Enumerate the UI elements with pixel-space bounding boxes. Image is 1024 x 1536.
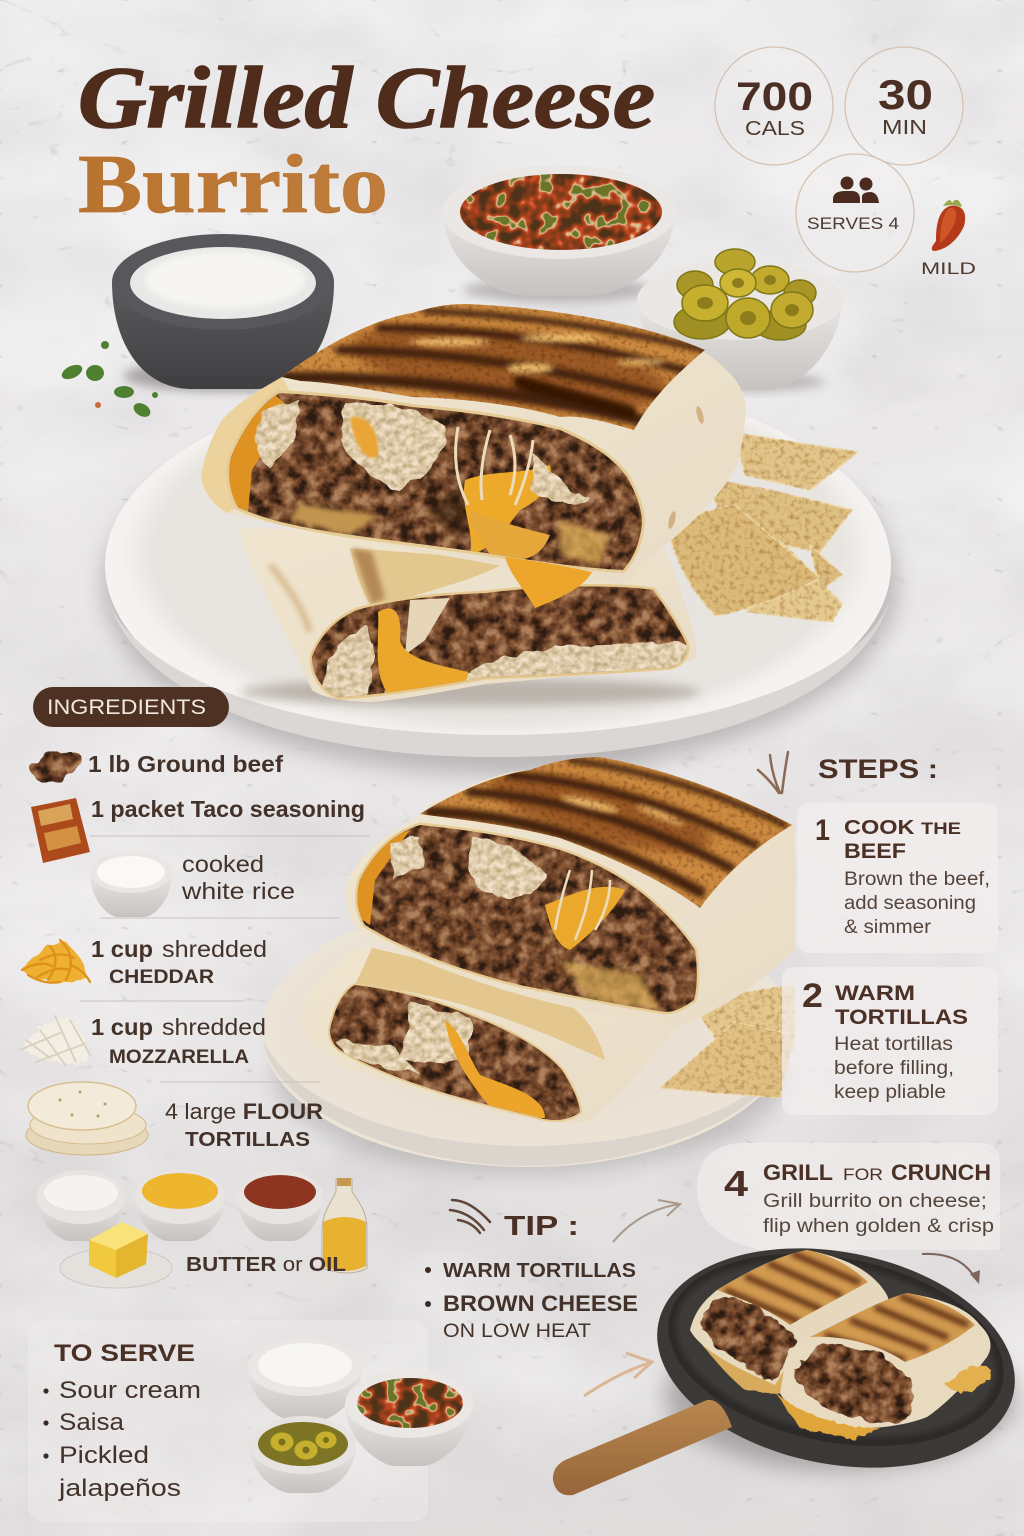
ingredient: ground beef xyxy=(30,751,283,783)
step 2 card: WARM xyxy=(835,982,915,1005)
title xyxy=(78,50,655,231)
steps heading xyxy=(758,752,938,793)
ingredient: taco seasoning: 1 packet Taco seasoning xyxy=(91,796,365,822)
ingredient: mozzarella: MOZZARELLA xyxy=(109,1047,249,1068)
step 1 card xyxy=(797,803,998,953)
upper burrito on main plate xyxy=(201,300,746,608)
serving bowl: sour cream xyxy=(248,1338,362,1420)
ingredient: cheddar: shredded xyxy=(162,936,267,962)
step 1 card: BEEF xyxy=(844,840,906,863)
ingredient: butter or oil: BUTTER or OIL xyxy=(186,1254,346,1276)
tip block: BROWN CHEESE xyxy=(443,1291,638,1316)
to serve panel: TO SERVE xyxy=(54,1340,195,1367)
tortilla chips xyxy=(668,433,858,622)
ingredient: cheddar: CHEDDAR xyxy=(109,967,214,988)
step 1 card: COOK THE xyxy=(844,817,961,839)
step 1 card: & simmer xyxy=(844,917,932,938)
step 2 card: before filling, xyxy=(834,1058,954,1079)
burrito in pan: front xyxy=(775,1293,992,1440)
ingredient: flour tortillas: 4 large FLOUR xyxy=(165,1099,323,1124)
step 4 card: CRUNCH xyxy=(891,1160,991,1185)
ingredient: white rice xyxy=(90,851,295,917)
wooden handle xyxy=(553,1400,732,1495)
badge: 30 min: 30 xyxy=(878,71,933,118)
to serve panel xyxy=(28,1320,428,1522)
step 4 card: 4 xyxy=(724,1163,748,1204)
step 4 card: flip when golden & crisp xyxy=(763,1216,994,1237)
step 2 card: 2 xyxy=(802,977,823,1015)
burrito in pan: rear xyxy=(690,1250,889,1385)
lower burrito on main plate xyxy=(240,527,700,706)
ingredients pill: INGREDIENTS xyxy=(47,696,206,719)
step 2 card xyxy=(782,967,998,1115)
badge: 700 cals xyxy=(715,47,833,165)
ingredient: white rice: white rice xyxy=(181,878,295,904)
to serve panel: Sour cream xyxy=(59,1377,201,1404)
to serve panel: jalapeños xyxy=(58,1475,181,1502)
step 1 card: Brown the beef, xyxy=(844,869,990,890)
ingredient: butter or oil xyxy=(37,1170,367,1288)
step 4 card: Grill burrito on cheese; xyxy=(763,1191,987,1212)
ingredient: mozzarella: 1 cup xyxy=(91,1014,153,1040)
title: Grilled Cheese xyxy=(78,50,655,147)
ingredient: mozzarella xyxy=(20,1014,266,1068)
ingredient: flour tortillas xyxy=(26,1082,323,1155)
bowl: pickled jalapeños xyxy=(637,249,843,392)
step 4 card xyxy=(697,1143,1000,1250)
icon: chili, mild xyxy=(921,200,976,278)
icon: chili, mild: MILD xyxy=(921,259,976,278)
to serve panel: Pickled xyxy=(59,1442,149,1469)
skillet with burritos xyxy=(552,1248,1024,1496)
ingredient: mozzarella: shredded xyxy=(162,1014,266,1040)
herbs garnish xyxy=(59,341,158,420)
serving bowl: jalapeños xyxy=(250,1416,356,1493)
tip block: ON LOW HEAT xyxy=(443,1321,591,1342)
badge: serves 4: SERVES 4 xyxy=(807,214,899,233)
steps heading: STEPS : xyxy=(818,754,938,784)
to serve panel: Saisa xyxy=(59,1409,125,1436)
bowl: sour cream xyxy=(112,234,334,392)
badge: 30 min: MIN xyxy=(882,117,927,139)
badge: 700 cals: 700 xyxy=(736,75,813,119)
badge: 700 cals: CALS xyxy=(745,118,805,140)
ingredient: cheddar: 1 cup xyxy=(91,936,153,962)
badge: serves 4 xyxy=(796,154,914,272)
lower burrito on second plate xyxy=(300,946,680,1125)
second plate xyxy=(262,897,792,1175)
serving bowl: salsa xyxy=(345,1370,473,1466)
tip block: WARM TORTILLAS xyxy=(443,1260,636,1282)
ingredient: ground beef: 1 lb Ground beef xyxy=(88,751,283,777)
step 1 card: add seasoning xyxy=(844,893,976,914)
ingredient: flour tortillas: TORTILLAS xyxy=(185,1129,310,1151)
step 2 card: TORTILLAS xyxy=(835,1006,968,1029)
ingredients pill xyxy=(33,687,229,727)
tip block xyxy=(425,1200,638,1342)
upper burrito on second plate xyxy=(345,750,800,1026)
arrow: tip to step 4 xyxy=(613,1200,680,1242)
ingredient: cheddar xyxy=(22,936,267,988)
step 2 card: keep pliable xyxy=(834,1082,946,1103)
arrow: step 4 to pan xyxy=(922,1254,980,1284)
chips on second plate xyxy=(660,985,795,1098)
title: Burrito xyxy=(78,138,388,231)
bowl: salsa xyxy=(442,165,676,302)
badge: 30 min xyxy=(845,47,963,165)
ingredient: white rice: cooked xyxy=(182,851,264,877)
step 4 card: GRILL xyxy=(763,1160,833,1185)
arrow: to pan xyxy=(584,1353,652,1396)
step 1 card: 1 xyxy=(815,814,830,847)
step 4 card: FOR xyxy=(843,1165,883,1184)
step 2 card: Heat tortillas xyxy=(834,1034,953,1055)
main plate xyxy=(102,373,898,775)
ingredient: taco seasoning xyxy=(31,796,365,863)
tip block: TIP : xyxy=(504,1210,579,1241)
